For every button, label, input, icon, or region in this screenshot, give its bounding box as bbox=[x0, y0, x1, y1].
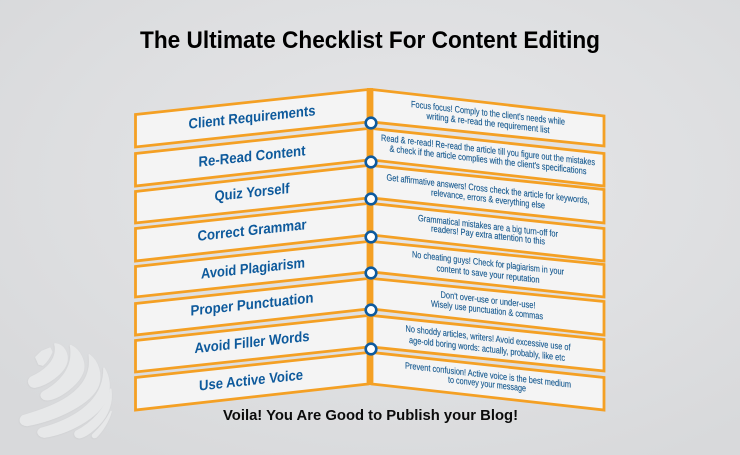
description: proper punctuation bbox=[372, 278, 604, 335]
item: Correct Grammar bbox=[136, 204, 368, 261]
description: avoid plagiarism bbox=[372, 242, 604, 297]
description: avoid plagiarism: content to save your reputation bbox=[436, 263, 540, 285]
description: re-read content: Read & re-read! Re-read the article till you figure out the mistakes bbox=[381, 133, 595, 167]
item: Proper Punctuation: Proper Punctuation bbox=[190, 290, 314, 320]
item: Re-Read Content: Re-Read Content bbox=[198, 143, 306, 171]
item: Use Active Voice bbox=[136, 352, 368, 410]
binder rings bbox=[366, 118, 376, 354]
description: correct grammar: Grammatical mistakes are a big turn-off for bbox=[418, 213, 558, 239]
description: correct grammar bbox=[372, 204, 604, 261]
title: The Ultimate Checklist For Content Editing bbox=[140, 27, 600, 54]
description: proper punctuation: Don't over-use or under-use! bbox=[440, 290, 536, 310]
item: Client Requirements: Client Requirements bbox=[188, 103, 316, 133]
item: Avoid Filler Words: Avoid Filler Words bbox=[194, 329, 310, 357]
panel: left checklist page bbox=[136, 90, 368, 410]
item: Use Active Voice: Use Active Voice bbox=[199, 367, 303, 395]
description: use active voice: Prevent confusion! Active voice is the best medium bbox=[405, 360, 571, 390]
item: Re-Read Content bbox=[136, 128, 368, 186]
item: Avoid Plagiarism: Avoid Plagiarism bbox=[201, 255, 305, 283]
item: Proper Punctuation bbox=[136, 278, 368, 335]
description: re-read content bbox=[372, 128, 604, 186]
description: avoid filler words: No shoddy articles, writers! Avoid excessive use of bbox=[406, 324, 571, 353]
item: Avoid Plagiarism bbox=[136, 242, 368, 297]
panel: right description page bbox=[372, 90, 604, 410]
footer message: Voila! You Are Good to Publish your Blog! bbox=[223, 407, 518, 424]
description: use active voice bbox=[372, 352, 604, 410]
description: avoid filler words bbox=[372, 316, 604, 371]
description: quiz yourself: relevance, errors & everything else bbox=[431, 187, 545, 211]
description: correct grammar: readers! Pay extra attention to this bbox=[431, 223, 545, 247]
item: Quiz Yorself: Quiz Yorself bbox=[214, 181, 290, 205]
item: Avoid Filler Words bbox=[136, 316, 368, 372]
description: client requirements bbox=[372, 90, 604, 146]
item: Quiz Yorself bbox=[136, 166, 368, 223]
description: use active voice: to convey your message bbox=[448, 375, 526, 393]
description: client requirements: writing & re-read the requirement list bbox=[426, 111, 550, 135]
spine: orange centre fold bbox=[367, 88, 373, 385]
icon: striped globe watermark bbox=[20, 344, 111, 438]
description: quiz yourself bbox=[372, 166, 604, 223]
description: proper punctuation: Wisely use punctuation & commas bbox=[431, 299, 543, 321]
item: Client Requirements bbox=[136, 90, 368, 147]
description: re-read content: & check if the article complies with the client's specifications bbox=[390, 144, 587, 176]
description: avoid filler words: age-old boring words: actually, probably, like etc bbox=[409, 335, 565, 363]
item: Correct Grammar: Correct Grammar bbox=[198, 217, 307, 245]
description: client requirements: Focus focus! Comply to the client's needs while bbox=[411, 99, 565, 127]
description: avoid plagiarism: No cheating guys! Check for plagiarism in your bbox=[412, 249, 564, 277]
description: quiz yourself: Get affirmative answers! Cross check the article for keywords, bbox=[386, 172, 590, 206]
